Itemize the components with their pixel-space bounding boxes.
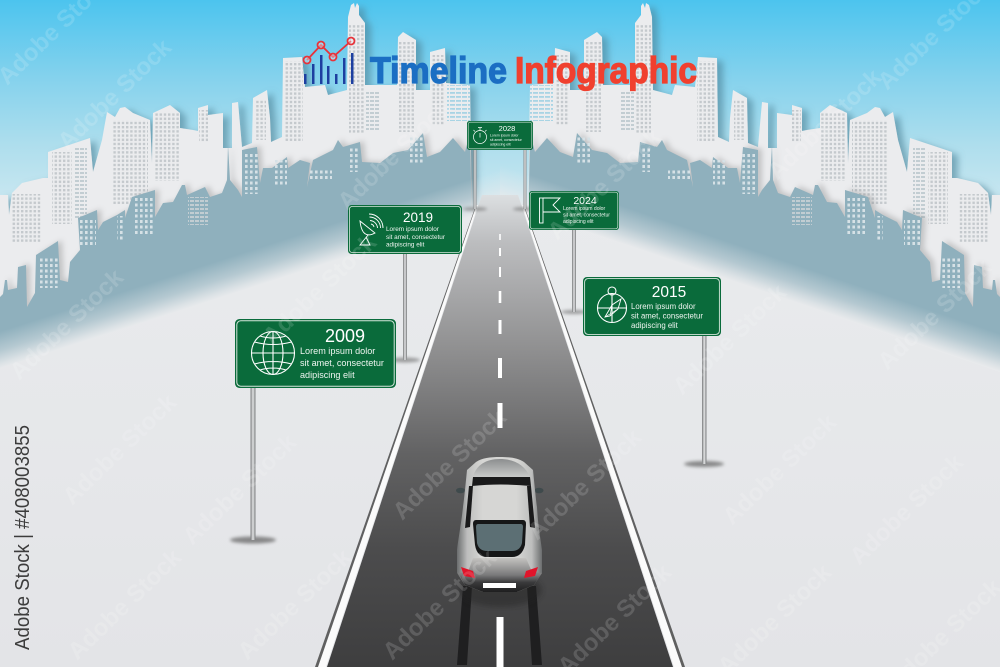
sign: 2028: 2028 — [499, 124, 515, 133]
sign: 2019: Lorem ipsum dolor — [386, 226, 440, 233]
sign: 2019: 2019 — [403, 210, 433, 225]
city skyline: white paper-cut buildings — [0, 3, 1000, 340]
sign: 2024: 2024 — [573, 195, 597, 207]
icon: globe — [252, 332, 294, 374]
number plate — [483, 583, 516, 588]
centre dashes — [496, 234, 504, 667]
sign: 2015: Lorem ipsum dolor — [631, 302, 696, 311]
sign: 2024 — [529, 191, 619, 314]
stock id number: Adobe Stock | #408003855 — [12, 425, 34, 650]
icon: stopwatch — [474, 128, 486, 144]
sign: 2028: sit amet, consectetur — [490, 138, 523, 142]
sign: 2009: Lorem ipsum dolor — [300, 346, 375, 356]
watermark text: Adobe Stock — [873, 253, 997, 375]
title: Timeline — [370, 50, 507, 91]
sign: 2024: Lorem ipsum dolor — [563, 206, 605, 212]
sign: 2009: adipiscing elit — [300, 370, 355, 380]
car shadow — [458, 573, 542, 607]
watermark text: Adobe Stock — [378, 543, 502, 665]
watermark text: Adobe Stock — [763, 63, 887, 185]
watermark text: Adobe Stock — [333, 93, 457, 215]
sign: 2024: adipiscing elit — [563, 219, 594, 225]
watermark text: Adobe Stock — [53, 33, 177, 155]
sign: 2015 — [583, 277, 724, 467]
watermark text: Adobe Stock — [388, 403, 512, 525]
watermark text: Adobe Stock — [63, 543, 187, 665]
rear bumper — [458, 558, 542, 592]
sign: 2019: adipiscing elit — [386, 242, 425, 249]
sign: 2019 — [348, 205, 462, 362]
bonnet — [473, 459, 530, 477]
body — [457, 457, 542, 592]
watermark text: Adobe Stock — [668, 278, 792, 400]
watermark text: Adobe Stock — [523, 423, 647, 545]
road edge lines — [318, 205, 478, 667]
watermark text: Adobe Stock — [543, 123, 667, 245]
sign: 2028: adipiscing elit — [490, 142, 511, 146]
sign: 2028 — [463, 121, 537, 211]
title: Infographic — [515, 50, 697, 91]
watermark text: Adobe Stock — [178, 428, 302, 550]
title — [370, 50, 697, 91]
rear window — [473, 520, 526, 557]
windscreen — [472, 477, 531, 486]
watermark text: Adobe Stock — [58, 388, 182, 510]
sign: 2028: Lorem ipsum dolor — [490, 134, 519, 138]
sign: 2009: sit amet, consectetur — [300, 358, 384, 368]
sign: 2009 — [230, 319, 396, 544]
mirrors — [456, 488, 465, 493]
sky background — [0, 0, 1000, 290]
watermark text: Adobe Stock — [258, 228, 382, 350]
road — [315, 195, 685, 667]
watermark text: Adobe Stock — [233, 543, 357, 665]
sign: 2024: sit amet, consectetur — [563, 212, 610, 218]
car — [456, 457, 544, 665]
icon: compass — [598, 287, 626, 322]
icon: satellite dish — [360, 214, 383, 245]
watermark text: Adobe Stock — [845, 448, 969, 570]
sign: 2015: 2015 — [652, 284, 686, 301]
sign: 2019: sit amet, consectetur — [386, 234, 446, 241]
sign: 2015: sit amet, consectetur — [631, 312, 703, 321]
side windows — [465, 486, 473, 528]
watermark text: Adobe Stock — [718, 408, 842, 530]
sign: 2009: 2009 — [325, 326, 365, 346]
city skyline: teal foreground silhouette — [0, 132, 1000, 395]
tail lights — [461, 567, 475, 578]
sign: 2015: adipiscing elit — [631, 321, 679, 330]
tyre tracks — [457, 586, 472, 665]
icon: flag — [540, 198, 560, 223]
logo icon: chart with red trend line — [304, 38, 354, 84]
watermark text: Adobe Stock — [5, 263, 129, 385]
road outer dark stripes — [315, 205, 476, 667]
